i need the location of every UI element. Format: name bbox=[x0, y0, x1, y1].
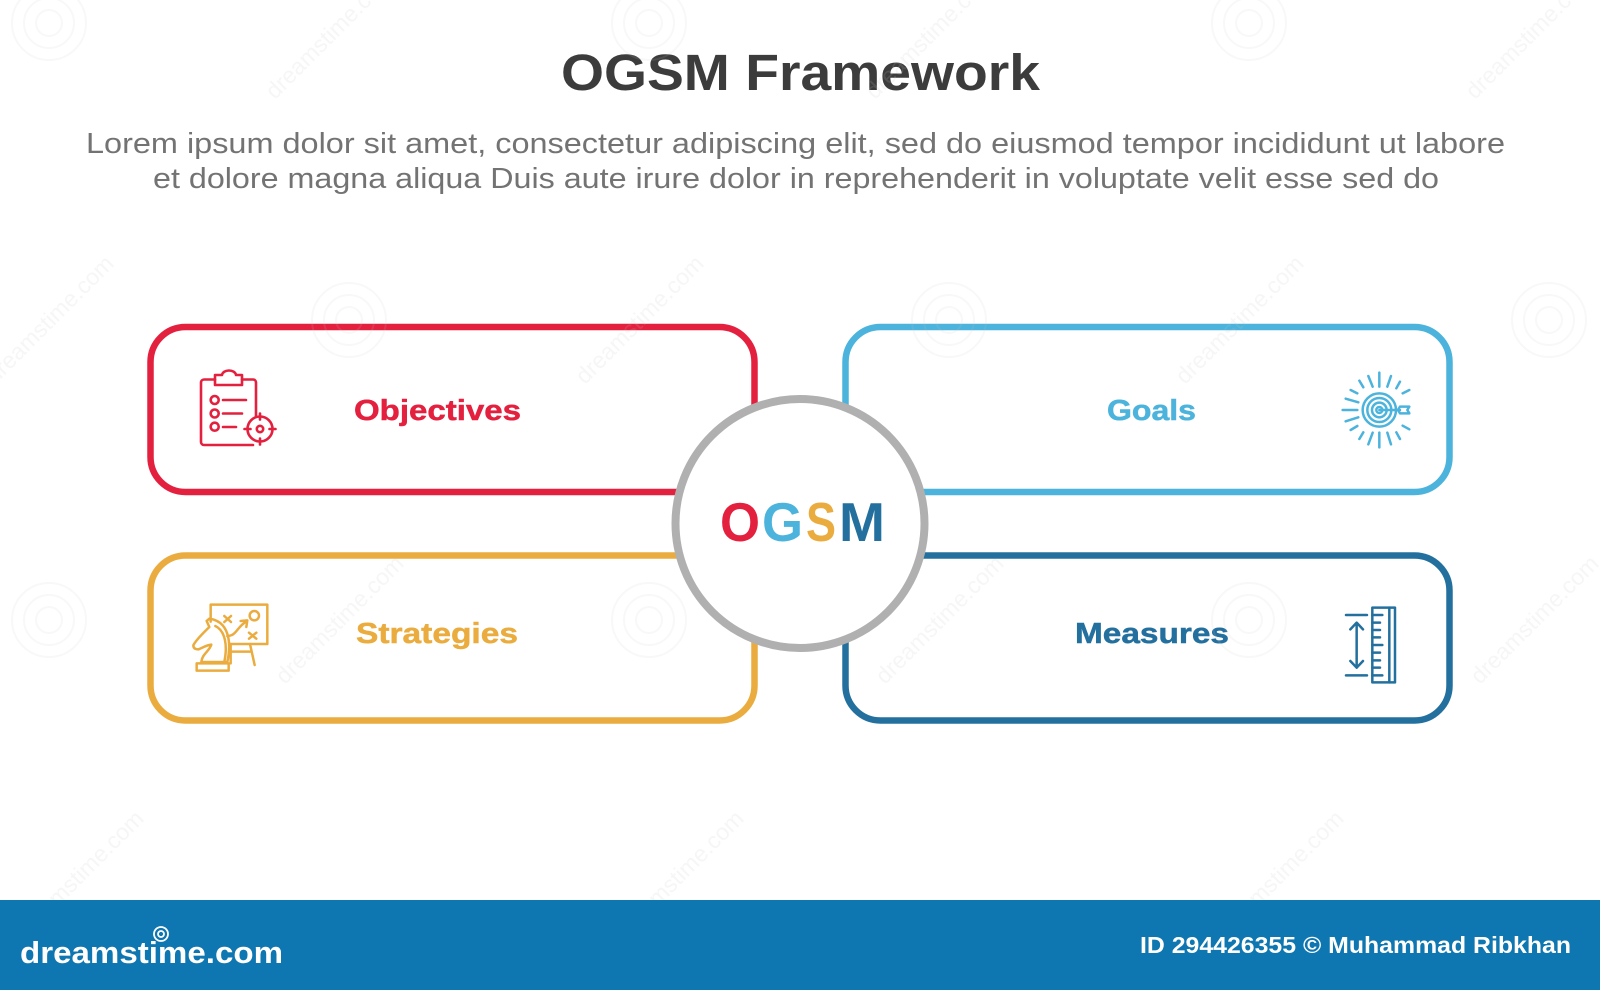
stock watermark: dreamstime.com bbox=[10, 805, 149, 944]
OGSM wordmark bbox=[720, 491, 885, 553]
subtitle text block: et dolore magna aliqua Duis aute irure dolor in reprehenderit in voluptate velit esse sed do bbox=[153, 163, 1439, 195]
icon: clipboard with target bbox=[201, 370, 276, 445]
stock watermark: dreamstime.com bbox=[610, 805, 749, 944]
subtitle text block bbox=[86, 128, 1505, 195]
icon: target with rays bbox=[1343, 373, 1409, 447]
footer logo: dreamstime.com bbox=[20, 935, 283, 970]
label: strategies: Strategies bbox=[356, 618, 518, 650]
footer image credit: ID 294426355 © Muhammad Ribkhan bbox=[1140, 932, 1571, 958]
stock watermark: dreamstime.com bbox=[870, 550, 1009, 689]
title: OGSM Framework bbox=[561, 44, 1041, 101]
OGSM wordmark: M bbox=[839, 491, 885, 553]
panel: strategies bbox=[150, 556, 754, 720]
OGSM wordmark: G bbox=[762, 491, 803, 553]
subtitle text block: Lorem ipsum dolor sit amet, consectetur adipiscing elit, sed do eiusmod tempor incididunt ut labore bbox=[86, 128, 1505, 160]
OGSM wordmark: S bbox=[806, 491, 836, 553]
panel: objectives bbox=[150, 327, 754, 492]
center circle with OGSM bbox=[676, 399, 924, 648]
footer bar bbox=[0, 900, 1600, 990]
panel: measures bbox=[846, 556, 1450, 720]
label: goals: Goals bbox=[1107, 395, 1196, 427]
stock watermark: dreamstime.com bbox=[570, 250, 709, 389]
stock watermark: dreamstime.com bbox=[1170, 250, 1309, 389]
stock watermark: dreamstime.com bbox=[1465, 550, 1600, 689]
icon: ruler with height arrow bbox=[1346, 608, 1395, 682]
stock watermark: dreamstime.com bbox=[270, 550, 409, 689]
label: objectives: Objectives bbox=[354, 395, 521, 427]
icon: chess knight and strategy board bbox=[193, 605, 267, 671]
stock watermark: dreamstime.com bbox=[1210, 805, 1349, 944]
OGSM wordmark: O bbox=[720, 491, 760, 553]
label: measures: Measures bbox=[1075, 618, 1229, 650]
panel: goals bbox=[846, 327, 1450, 492]
